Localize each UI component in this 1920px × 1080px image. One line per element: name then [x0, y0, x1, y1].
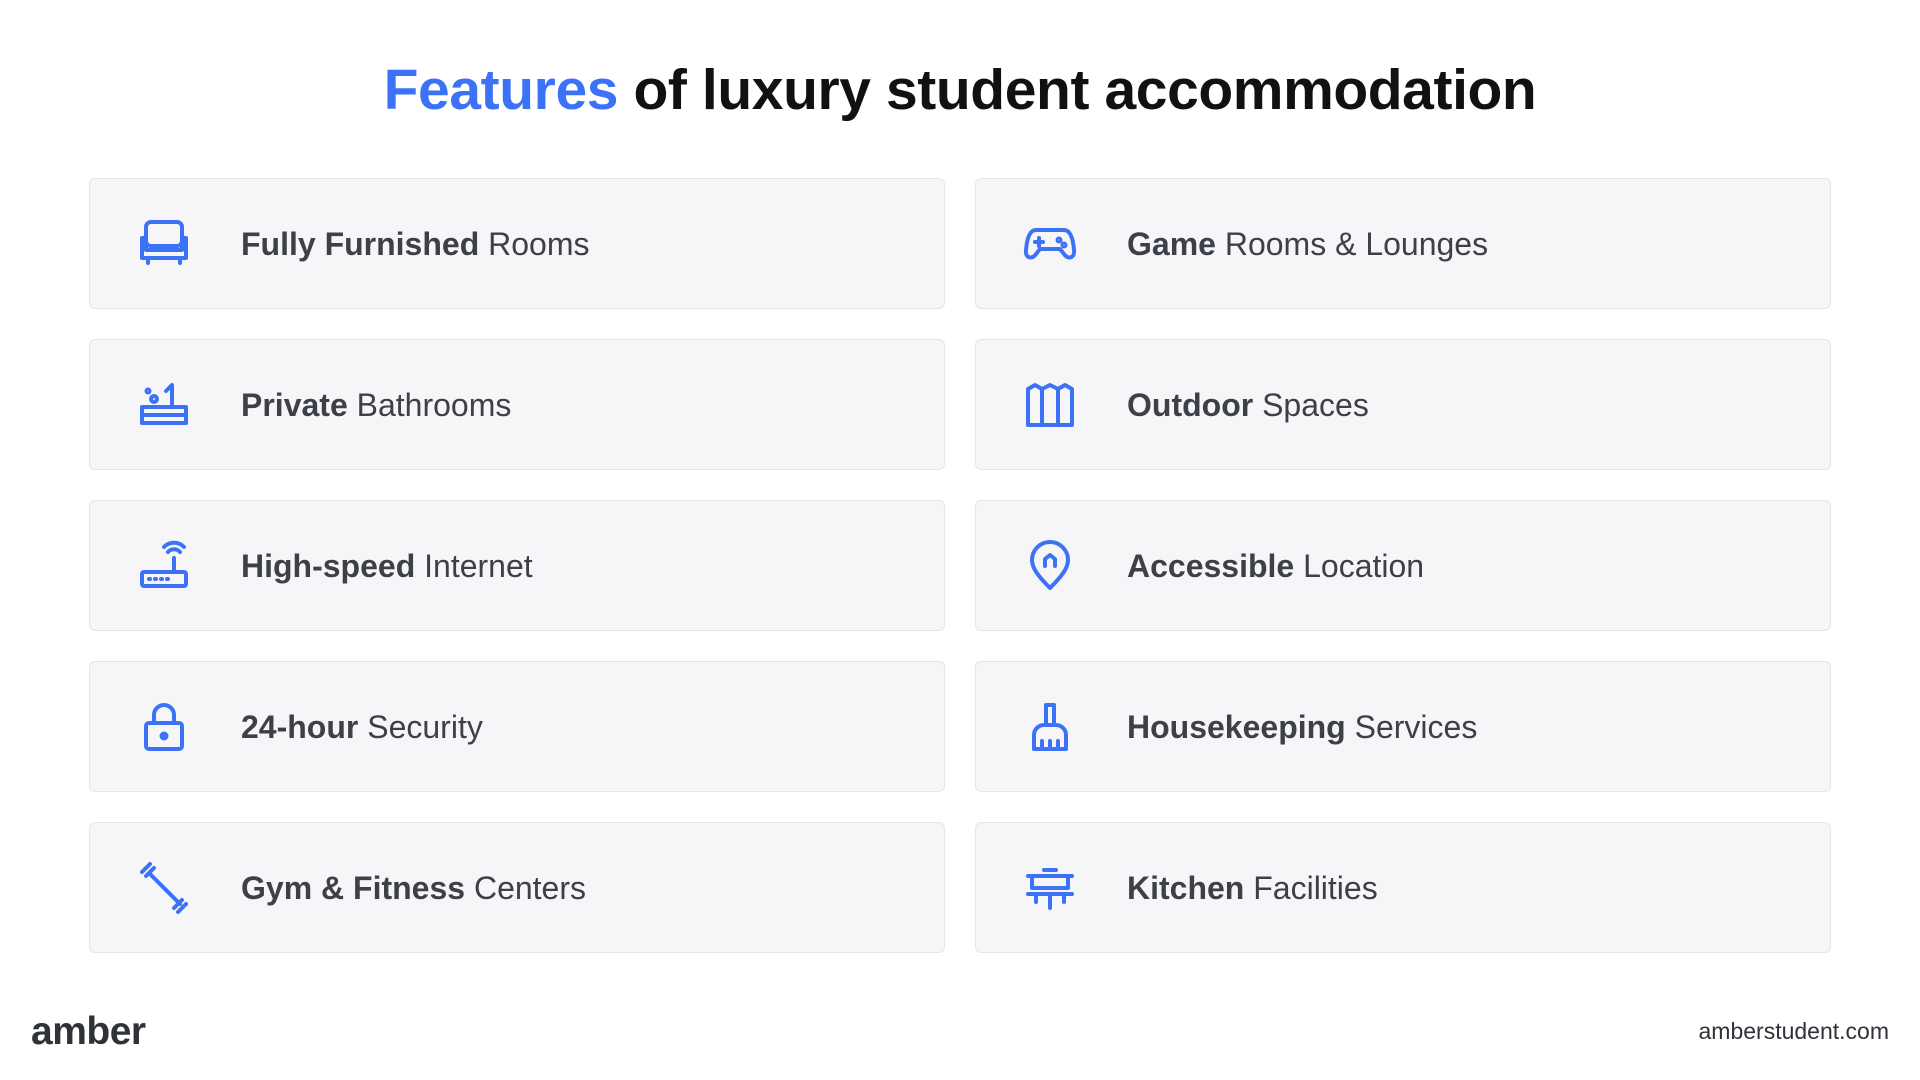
label: Kitchen Facilities — [1127, 870, 1378, 906]
card: game rooms — [975, 178, 1831, 309]
icon: gamepad — [1024, 228, 1076, 260]
label: Outdoor Spaces — [1127, 387, 1369, 423]
icon: router — [140, 540, 188, 588]
icon: fence — [1026, 383, 1074, 427]
label: Private Bathrooms — [241, 387, 511, 423]
icon: sofa — [140, 220, 188, 265]
icon: map pin — [1030, 540, 1070, 590]
card: bathrooms — [89, 339, 945, 470]
label: Housekeeping Services — [1127, 709, 1477, 745]
card: housekeeping — [975, 661, 1831, 792]
footer logo: amber — [31, 1010, 146, 1053]
card: location — [975, 500, 1831, 631]
icon: lock — [144, 703, 184, 751]
label: Gym & Fitness Centers — [241, 870, 586, 906]
icon: broom — [1032, 703, 1068, 751]
icon: stove — [1026, 868, 1074, 910]
footer url: amberstudent.com — [1699, 1018, 1889, 1044]
card: kitchen — [975, 822, 1831, 953]
card: outdoor — [975, 339, 1831, 470]
card: security — [89, 661, 945, 792]
card: gym — [89, 822, 945, 953]
card: internet — [89, 500, 945, 631]
icon: bathtub — [140, 383, 188, 425]
icon: dumbbell — [140, 862, 188, 914]
label: Fully Furnished Rooms — [241, 226, 589, 262]
label: Accessible Location — [1127, 548, 1424, 584]
title: Features of luxury student accommodation — [384, 58, 1536, 122]
card: furnished rooms — [89, 178, 945, 309]
label: 24-hour Security — [241, 709, 483, 745]
label: High-speed Internet — [241, 548, 533, 584]
label: Game Rooms & Lounges — [1127, 226, 1488, 262]
